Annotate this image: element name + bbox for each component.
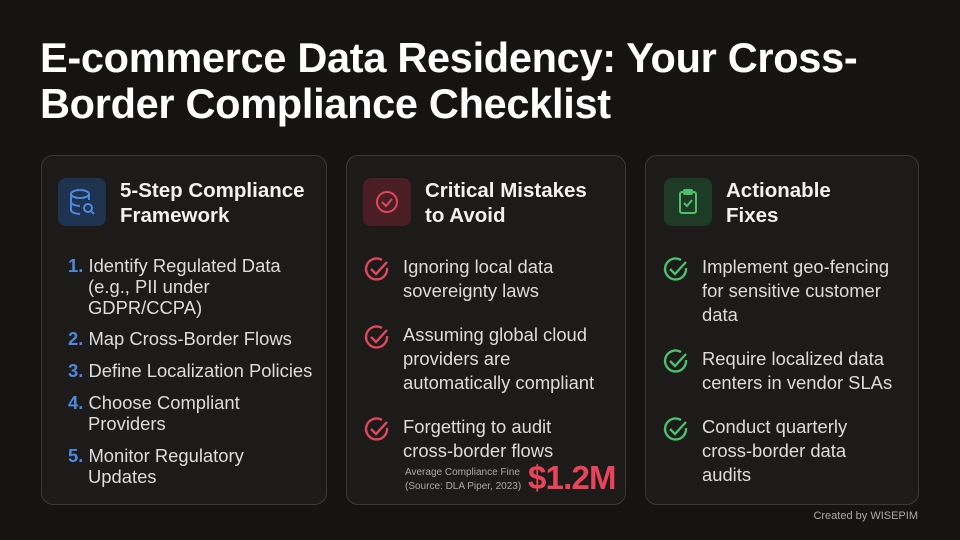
list: Forgetting to audit <box>403 416 551 437</box>
title: E-commerce Data Residency: Your Cross- <box>40 34 857 81</box>
list: Updates <box>88 466 156 487</box>
heading: Framework <box>120 204 229 227</box>
list: 2. Map Cross-Border Flows <box>68 328 292 349</box>
stat callout: Average Compliance Fine <box>405 467 520 478</box>
list: automatically compliant <box>403 372 594 393</box>
list: Require localized data <box>702 348 884 369</box>
stat callout: (Source: DLA Piper, 2023) <box>405 481 521 492</box>
list: Conduct quarterly <box>702 416 847 437</box>
list <box>364 256 616 496</box>
stat callout: $1.2M <box>528 459 616 496</box>
icon: red check circle <box>363 178 411 226</box>
icon: database search <box>58 178 106 226</box>
list: 3. Define Localization Policies <box>68 360 312 381</box>
panel: framework <box>41 155 327 505</box>
list: Implement geo-fencing <box>702 256 889 277</box>
heading <box>726 179 831 227</box>
panel: fixes <box>645 155 919 505</box>
list: centers in vendor SLAs <box>702 372 892 393</box>
list: 1. Identify Regulated Data <box>68 255 281 276</box>
title <box>40 34 857 127</box>
footer credit: Created by WISEPIM <box>813 510 918 522</box>
list: 5. Monitor Regulatory <box>68 445 244 466</box>
list: data <box>702 304 738 325</box>
heading: Fixes <box>726 204 778 227</box>
heading: Critical Mistakes <box>425 179 587 202</box>
list: 4. Choose Compliant <box>68 392 240 413</box>
list: Providers <box>88 413 166 434</box>
panel: mistakes <box>346 155 626 505</box>
list <box>664 256 892 485</box>
heading: to Avoid <box>425 204 505 227</box>
list: Ignoring local data <box>403 256 553 277</box>
list: audits <box>702 464 751 485</box>
title: Border Compliance Checklist <box>40 80 611 127</box>
heading <box>120 179 305 227</box>
heading: 5-Step Compliance <box>120 179 305 202</box>
icon: clipboard check <box>664 178 712 226</box>
heading: Actionable <box>726 179 831 202</box>
list: (e.g., PII under <box>88 276 210 297</box>
heading <box>425 179 587 227</box>
list: cross-border data <box>702 440 846 461</box>
list: cross-border flows <box>403 440 553 461</box>
list: for sensitive customer <box>702 280 881 301</box>
stat callout <box>405 459 616 496</box>
list: GDPR/CCPA) <box>88 297 202 318</box>
list: Assuming global cloud <box>403 324 587 345</box>
list: sovereignty laws <box>403 280 539 301</box>
list: providers are <box>403 348 510 369</box>
list <box>68 255 312 487</box>
